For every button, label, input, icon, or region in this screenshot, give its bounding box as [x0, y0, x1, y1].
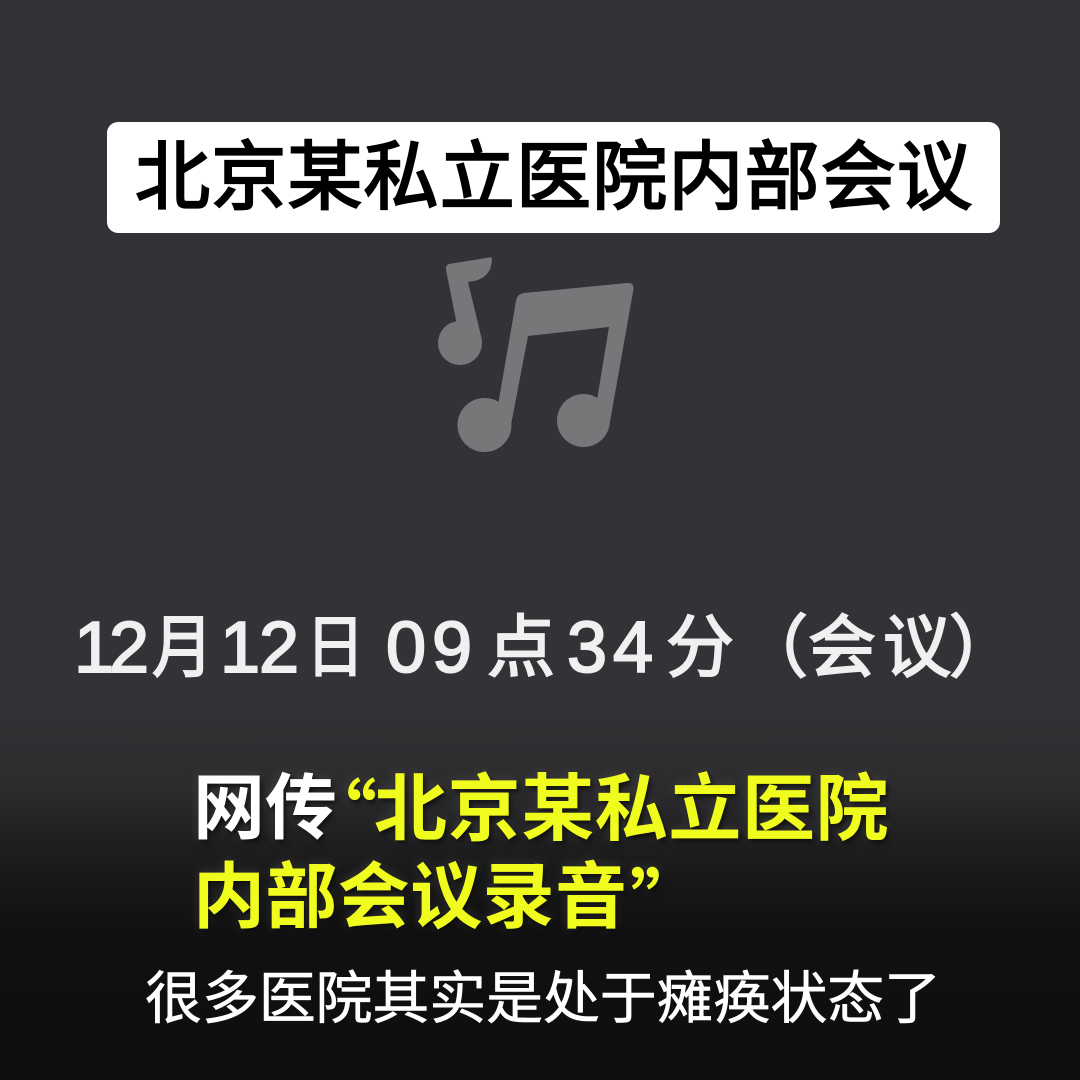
- time: 09: [386, 608, 478, 688]
- recording timestamp: 点: [487, 610, 555, 686]
- title text: 北京某私立医院内部会议: [135, 135, 973, 219]
- recording timestamp: 月: [152, 610, 213, 686]
- headline line 2: 内部会议录音: [193, 858, 627, 938]
- subtitle: 很多医院其实是处于瘫痪状态了: [145, 967, 941, 1031]
- recording timestamp: [74, 608, 1017, 688]
- headline caption: 北京某私立医院: [374, 769, 889, 850]
- headline caption: ”: [630, 845, 703, 951]
- recording timestamp: 分: [666, 610, 734, 686]
- icon: music notes: [438, 257, 634, 452]
- recording timestamp: 日: [306, 610, 364, 686]
- headline caption: “: [304, 756, 377, 862]
- date: 12: [74, 608, 144, 688]
- recording timestamp: ）: [949, 610, 1017, 686]
- headline line 1: 网传: [193, 769, 337, 849]
- meeting tag: （: [740, 610, 808, 686]
- recording timestamp: 12: [220, 608, 298, 688]
- recording timestamp: 34: [567, 608, 659, 688]
- title banner: [107, 122, 1000, 233]
- headline caption: [193, 756, 890, 951]
- recording timestamp: 会: [808, 610, 876, 686]
- recording timestamp: 议: [883, 610, 951, 686]
